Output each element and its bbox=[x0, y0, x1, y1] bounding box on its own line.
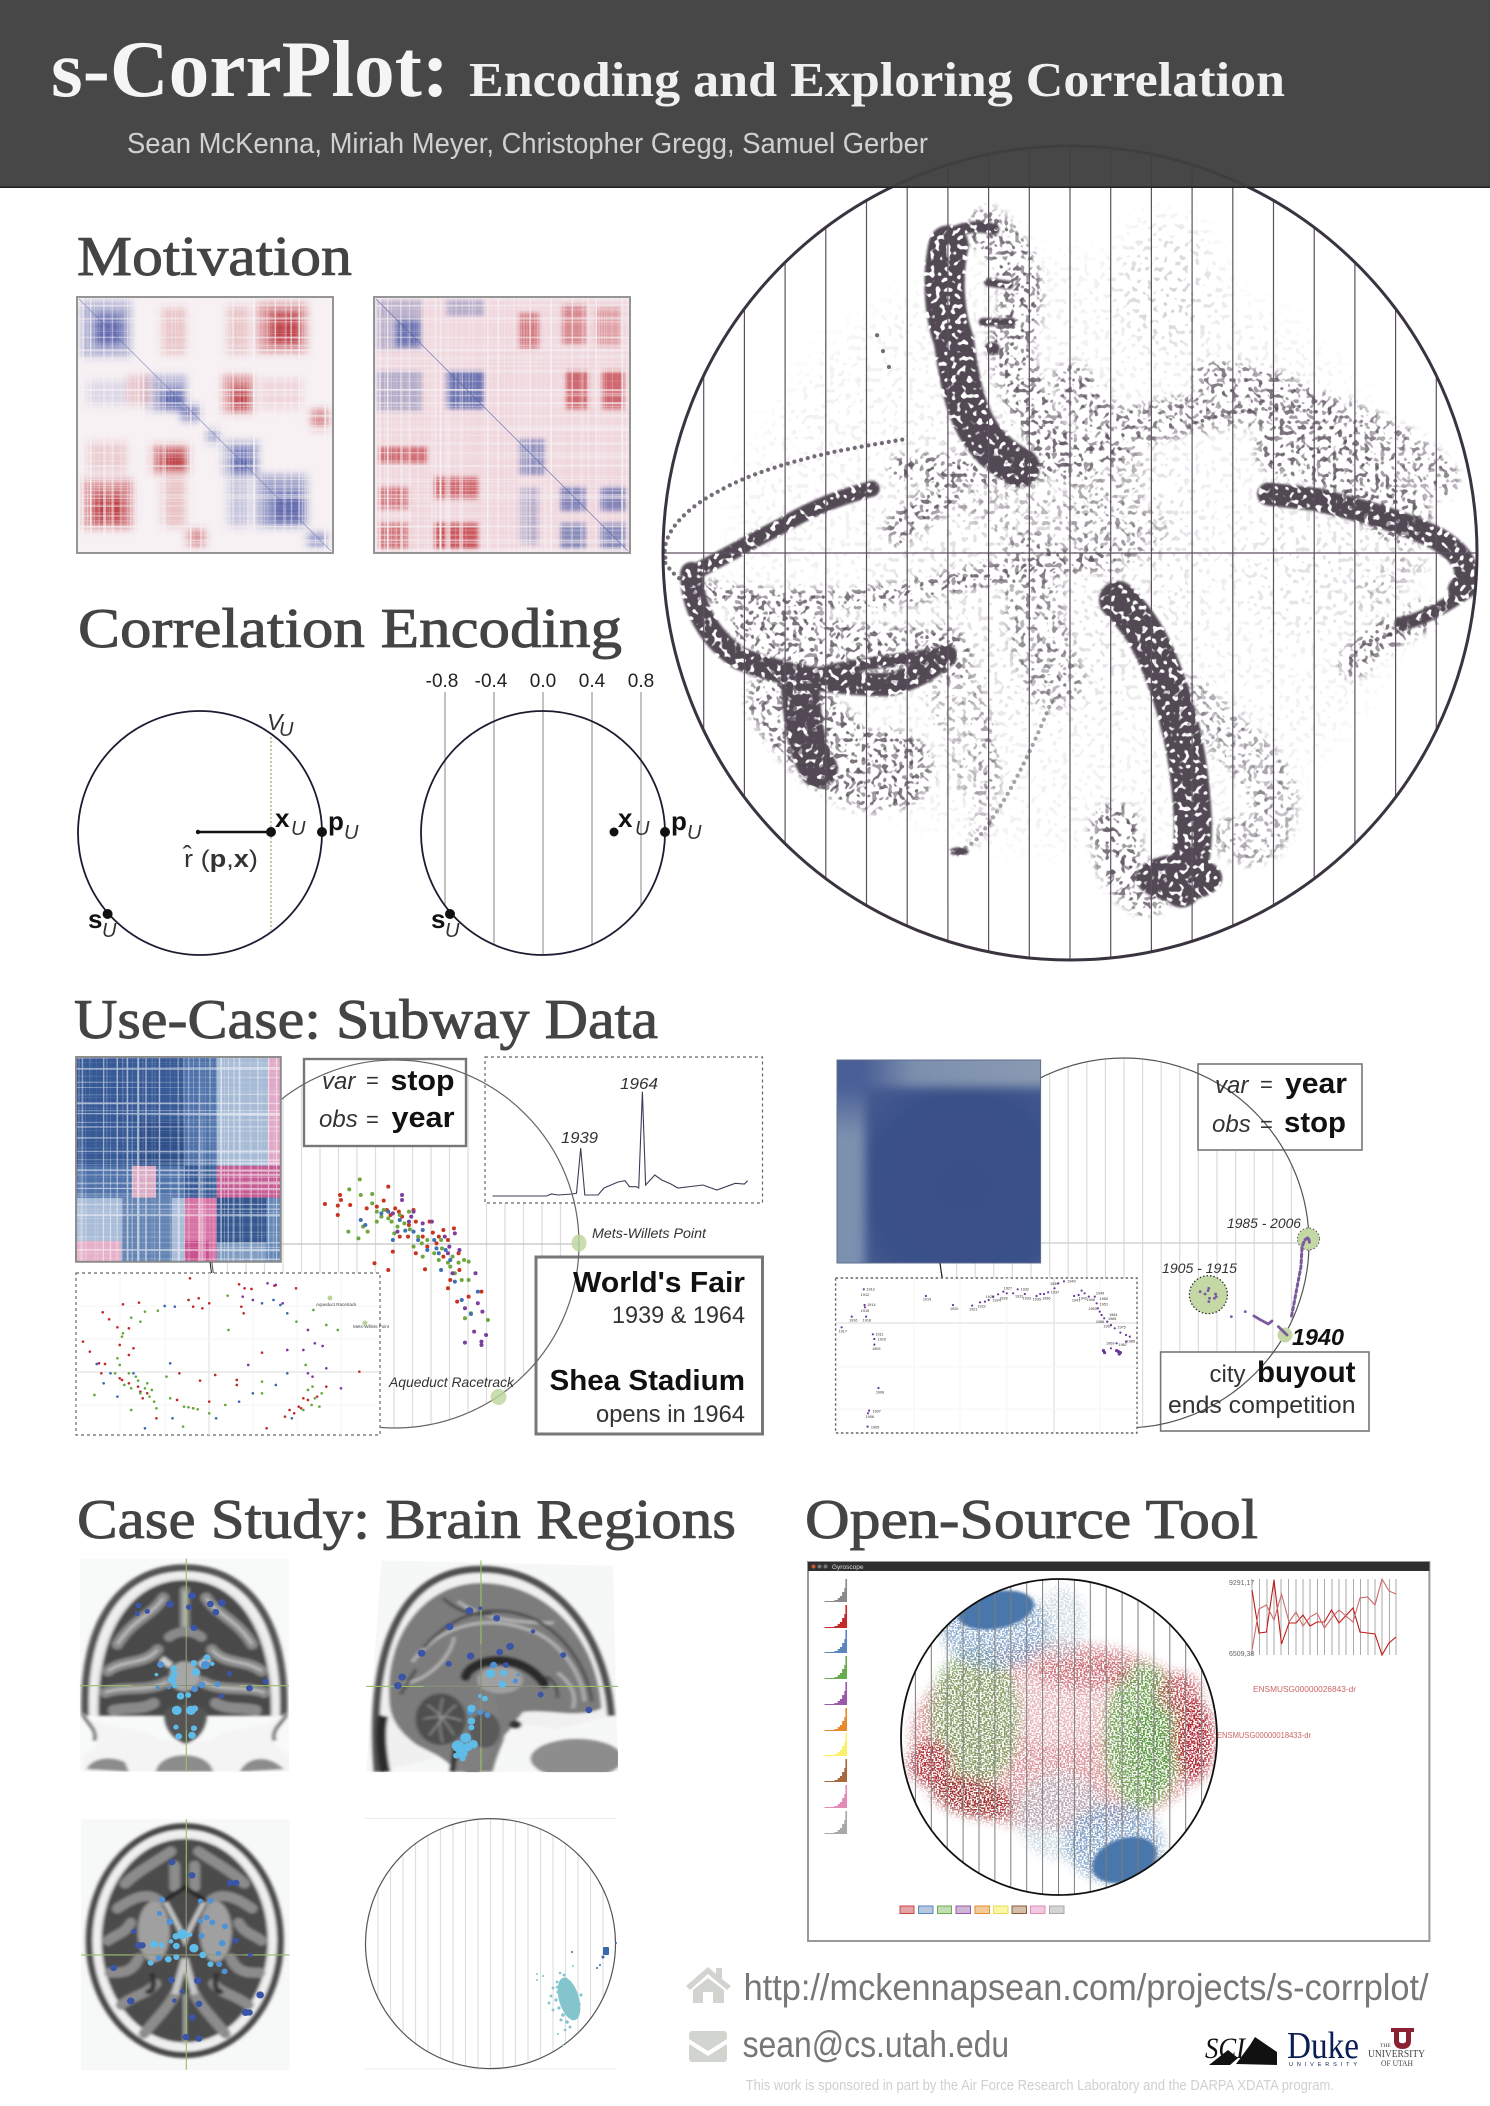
heading: Open-Source Tool: Open-Source Tool bbox=[805, 1489, 1258, 1551]
labels: U bbox=[687, 822, 702, 844]
icon: home bbox=[686, 1967, 731, 2003]
annotation text: buyout bbox=[1257, 1356, 1356, 1389]
gene labels bbox=[1217, 1685, 1356, 1740]
dashed inset timeline scatter: 1907 bbox=[872, 1409, 881, 1413]
hero scatter points bbox=[665, 219, 1470, 901]
window frame bbox=[808, 1562, 1429, 1941]
dashed inset timeline scatter: 1941 bbox=[1072, 1299, 1080, 1303]
panel: brain views bbox=[78, 1556, 623, 2073]
blue cluster bbox=[571, 1942, 617, 1969]
title: s-CorrPlot: bbox=[51, 26, 449, 114]
panel: subway var=year view bbox=[817, 1040, 1369, 1440]
dashed inset timeline scatter: 1914 bbox=[867, 1303, 876, 1307]
annotation text: ends competition bbox=[1168, 1392, 1356, 1419]
var/obs text: year bbox=[1285, 1068, 1347, 1100]
brain: coronal slice bbox=[78, 1556, 294, 1772]
var/obs box bbox=[1198, 1064, 1362, 1150]
annotation text: city bbox=[1210, 1361, 1246, 1388]
var/obs text: stop bbox=[390, 1065, 454, 1097]
annotation text: opens in 1964 bbox=[596, 1401, 745, 1428]
line chart box: 1964 bbox=[620, 1076, 658, 1093]
gene labels: ENSMUSG00000026843-dr bbox=[1253, 1685, 1356, 1694]
year trajectory points bbox=[1200, 1237, 1310, 1335]
hero correlation grid lines bbox=[660, 140, 1480, 970]
header band bbox=[0, 0, 1490, 188]
logo: University of Utah: UNIVERSITY bbox=[1368, 2049, 1425, 2060]
dashed inset timeline scatter: 1935 bbox=[1033, 1298, 1041, 1302]
panel: encoding diagram left bbox=[78, 709, 359, 955]
annotation box: World's Fair and Shea Stadium bbox=[536, 1257, 762, 1434]
dashed inset timeline scatter: 1939 bbox=[1050, 1282, 1058, 1286]
logo: Duke University: Duke bbox=[1287, 2025, 1359, 2067]
points bbox=[445, 827, 670, 919]
panel: brain s-CorrPlot circle bbox=[365, 1810, 617, 2075]
grid lines bbox=[915, 1575, 1202, 1900]
heading: Correlation Encoding: Correlation Encoding bbox=[78, 598, 622, 660]
period labels: 1940 bbox=[1292, 1324, 1344, 1350]
logo: University of Utah: OF UTAH bbox=[1381, 2058, 1413, 2068]
var/obs text: = bbox=[366, 1068, 379, 1093]
dashed inset scatter bbox=[76, 1273, 390, 1435]
labels: U bbox=[279, 719, 294, 741]
annotation box: city buyout bbox=[1161, 1352, 1369, 1431]
points bbox=[103, 827, 327, 919]
annotation text bbox=[550, 1267, 745, 1428]
var/obs box bbox=[304, 1059, 466, 1146]
circle outline bbox=[211, 1060, 579, 1428]
dashed inset timeline scatter: 1905 bbox=[871, 1425, 879, 1429]
dashed inset timeline scatter: 1932 bbox=[1021, 1288, 1029, 1292]
dashed inset timeline scatter: 1913 bbox=[866, 1288, 875, 1292]
var/obs text bbox=[1212, 1068, 1347, 1139]
annotation text: 1939 & 1964 bbox=[612, 1302, 745, 1329]
heading: Use-Case: Subway Data: Use-Case: Subway Data bbox=[74, 989, 658, 1051]
dashed inset timeline scatter: 1915 bbox=[861, 1309, 869, 1313]
dashed inset timeline scatter: 1951 bbox=[1100, 1302, 1108, 1306]
line chart box bbox=[485, 1057, 762, 1203]
arc of coloured station points bbox=[325, 1179, 488, 1345]
annotation text: World's Fair bbox=[573, 1267, 745, 1299]
authors: Sean McKenna, Miriah Meyer, Christopher Gregg, Samuel Gerber bbox=[127, 128, 928, 160]
axis tick labels bbox=[426, 671, 654, 692]
year correlation matrix bbox=[836, 1060, 1042, 1264]
dashed inset timeline scatter: 1906 bbox=[866, 1415, 874, 1419]
labels: U bbox=[344, 822, 359, 844]
dashed inset timeline scatter: 1917 bbox=[839, 1330, 847, 1334]
dashed inset timeline scatter: 1949 bbox=[1096, 1292, 1104, 1296]
correlation lines bbox=[445, 692, 641, 955]
heading: Case Study: Brain Regions: Case Study: Brain Regions bbox=[77, 1489, 736, 1551]
panel: motivation matrix 1 bbox=[77, 297, 333, 553]
dashed inset timeline scatter: 1925 bbox=[986, 1295, 994, 1299]
dashed inset timeline scatter: 1927 bbox=[1004, 1286, 1012, 1290]
guide line for v_U bbox=[270, 733, 272, 930]
var/obs text: stop bbox=[1284, 1107, 1346, 1139]
station labels: Aqueduct Racetrack bbox=[388, 1374, 515, 1390]
dashed inset timeline scatter: 1908 bbox=[876, 1390, 884, 1394]
dashed inset timeline scatter: 1942 bbox=[1079, 1296, 1087, 1300]
labels: U bbox=[445, 920, 460, 942]
grid of correlation lines bbox=[956, 1058, 1298, 1426]
dashed inset timeline scatter: 1966 bbox=[1096, 1320, 1104, 1324]
dashed inset scatter: Mets-Willets Point bbox=[353, 1324, 390, 1329]
dashed inset timeline scatter: 1912 bbox=[861, 1293, 869, 1297]
var/obs text: = bbox=[366, 1107, 379, 1132]
period labels bbox=[1162, 1216, 1344, 1350]
dashed inset timeline scatter bbox=[836, 1278, 1137, 1433]
gene scatter bbox=[908, 1584, 1214, 1893]
dashed inset timeline scatter: 1950 bbox=[1100, 1297, 1108, 1301]
labels: U bbox=[291, 818, 306, 840]
teal cluster bbox=[536, 1965, 585, 2046]
var/obs text bbox=[319, 1065, 454, 1134]
contact email: sean@cs.utah.edu bbox=[743, 2024, 1009, 2065]
stop correlation matrix bbox=[76, 1057, 281, 1262]
brain: axial slice bbox=[78, 1816, 294, 2073]
dashed inset timeline scatter: 1909 bbox=[872, 1347, 880, 1351]
dashed inset timeline scatter: 1987 bbox=[1118, 1343, 1127, 1347]
grid lines bbox=[378, 1810, 603, 2075]
dashed inset timeline scatter: 1911 bbox=[875, 1333, 884, 1337]
labels: s bbox=[431, 904, 445, 934]
labels: U bbox=[635, 818, 650, 840]
circle outline bbox=[939, 1058, 1309, 1428]
dashed inset timeline scatter: 1975 bbox=[1117, 1325, 1126, 1329]
project URL: http://mckennapsean.com/projects/s-corrplot/ bbox=[744, 1967, 1429, 2008]
dashed inset timeline scatter: 1948 bbox=[1087, 1298, 1095, 1302]
dashed inset timeline scatter: 1920 bbox=[950, 1307, 958, 1311]
labels: p bbox=[328, 806, 344, 836]
dashed inset timeline scatter: 1919 bbox=[923, 1298, 931, 1302]
logo: University of Utah bbox=[1368, 2028, 1425, 2068]
dashed inset timeline scatter: 1916 bbox=[849, 1319, 858, 1323]
labels: U bbox=[102, 920, 117, 942]
panel: subway var=stop view bbox=[76, 1050, 762, 1440]
axis tick labels: -0.4 bbox=[475, 671, 508, 692]
scatter circle outline bbox=[901, 1579, 1217, 1895]
logo: University of Utah: THE bbox=[1380, 2043, 1391, 2049]
var/obs text: year bbox=[392, 1102, 454, 1134]
var/obs text: var bbox=[322, 1068, 356, 1095]
title bar: Gyroscope bbox=[832, 1564, 864, 1571]
panel: encoding diagram right bbox=[421, 671, 702, 955]
panel: motivation matrix 2 bbox=[374, 297, 630, 553]
annotation text bbox=[1168, 1356, 1356, 1419]
cluster legend swatches bbox=[900, 1906, 1064, 1914]
station labels bbox=[388, 1225, 707, 1390]
line chart box: 1939 bbox=[561, 1130, 598, 1147]
panel: open-source tool screenshot bbox=[808, 1562, 1429, 1941]
subtitle: Encoding and Exploring Correlation bbox=[469, 52, 1285, 107]
axis tick labels: 0.4 bbox=[579, 671, 606, 692]
axis tick labels: 0.0 bbox=[530, 671, 556, 692]
hero circle outline bbox=[663, 146, 1477, 960]
dashed inset timeline scatter: 1921 bbox=[969, 1308, 978, 1312]
panel: large s-CorrPlot hero scatter bbox=[660, 140, 1480, 970]
dashed inset timeline scatter: 1985 bbox=[1127, 1340, 1135, 1344]
logo: Duke University: UNIVERSITY bbox=[1289, 2062, 1357, 2068]
dashed inset timeline scatter: 1964 bbox=[1109, 1313, 1117, 1317]
period labels: 1905 - 1915 bbox=[1162, 1261, 1238, 1276]
dashed inset timeline scatter: 1933 bbox=[1023, 1296, 1031, 1300]
sponsor note: This work is sponsored in part by the Air Force Research Laboratory and the DARPA XDATA program. bbox=[746, 2077, 1334, 2094]
correlation segment bbox=[198, 831, 271, 833]
axis tick labels: -0.8 bbox=[426, 671, 458, 692]
dashed inset timeline scatter: 1910 bbox=[878, 1337, 886, 1341]
station labels: Mets-Willets Point bbox=[592, 1225, 707, 1241]
dashed inset timeline scatter: 1937 bbox=[1051, 1290, 1059, 1294]
var/obs text: obs bbox=[1212, 1111, 1251, 1138]
title bar bbox=[808, 1562, 1429, 1571]
var/obs text: = bbox=[1260, 1112, 1273, 1137]
labels: r̂ (p,x) bbox=[183, 845, 258, 873]
unit circle bbox=[78, 711, 322, 955]
histograms bbox=[824, 1579, 847, 1834]
labels: x bbox=[618, 803, 633, 833]
link from matrix to scatter bbox=[210, 1262, 212, 1273]
heading: Motivation: Motivation bbox=[77, 226, 352, 288]
labels: p bbox=[671, 806, 687, 836]
unit circle bbox=[421, 711, 665, 955]
logo: SCI bbox=[1205, 2032, 1277, 2065]
circle outline bbox=[366, 1819, 616, 2069]
dashed inset timeline scatter: 1924 bbox=[992, 1298, 1001, 1302]
dashed inset timeline scatter: 1936 bbox=[1042, 1296, 1050, 1300]
highlighted stations bbox=[490, 1234, 586, 1405]
highlighted periods bbox=[1189, 1228, 1320, 1342]
var/obs text: obs bbox=[319, 1106, 358, 1133]
selected gene line chart: 6509,38 bbox=[1229, 1651, 1254, 1658]
labels bbox=[88, 709, 359, 942]
dashed inset scatter: Aqueduct Racetrack bbox=[316, 1302, 357, 1307]
dashed inset timeline scatter: 1922 bbox=[977, 1304, 986, 1308]
selected gene line chart: 9291,17 bbox=[1229, 1580, 1254, 1587]
dashed inset timeline scatter: 1965 bbox=[1108, 1317, 1116, 1321]
labels: s bbox=[88, 904, 102, 934]
var/obs text: var bbox=[1215, 1072, 1249, 1099]
dashed inset timeline scatter: 1931 bbox=[1015, 1295, 1023, 1299]
dashed inset timeline scatter: 1940 bbox=[1067, 1280, 1076, 1284]
selected gene line chart bbox=[1229, 1579, 1396, 1658]
grid of correlation lines bbox=[227, 1076, 578, 1428]
logo: SCI: SCI bbox=[1205, 2032, 1247, 2065]
dashed inset timeline scatter: 1928 bbox=[999, 1296, 1008, 1300]
dashed inset timeline scatter: 1918 bbox=[863, 1319, 871, 1323]
gene labels: ENSMUSG00000018433-dr bbox=[1217, 1731, 1311, 1740]
labels: x bbox=[275, 803, 290, 833]
icon: mail bbox=[689, 2031, 727, 2062]
labels bbox=[431, 803, 702, 942]
dashed inset timeline scatter: 1969 bbox=[1106, 1342, 1114, 1346]
dashed inset timeline scatter: 1953 bbox=[1088, 1307, 1097, 1311]
labels: V bbox=[267, 709, 285, 735]
axis tick labels: 0.8 bbox=[628, 671, 654, 692]
period labels: 1985 - 2006 bbox=[1227, 1216, 1302, 1231]
dashed inset timeline scatter: 1967 bbox=[1103, 1324, 1112, 1328]
annotation text: Shea Stadium bbox=[550, 1365, 745, 1397]
link from matrix to scatter bbox=[940, 1263, 942, 1278]
var/obs text: = bbox=[1260, 1072, 1273, 1097]
brain: sagittal slice bbox=[362, 1557, 623, 1778]
